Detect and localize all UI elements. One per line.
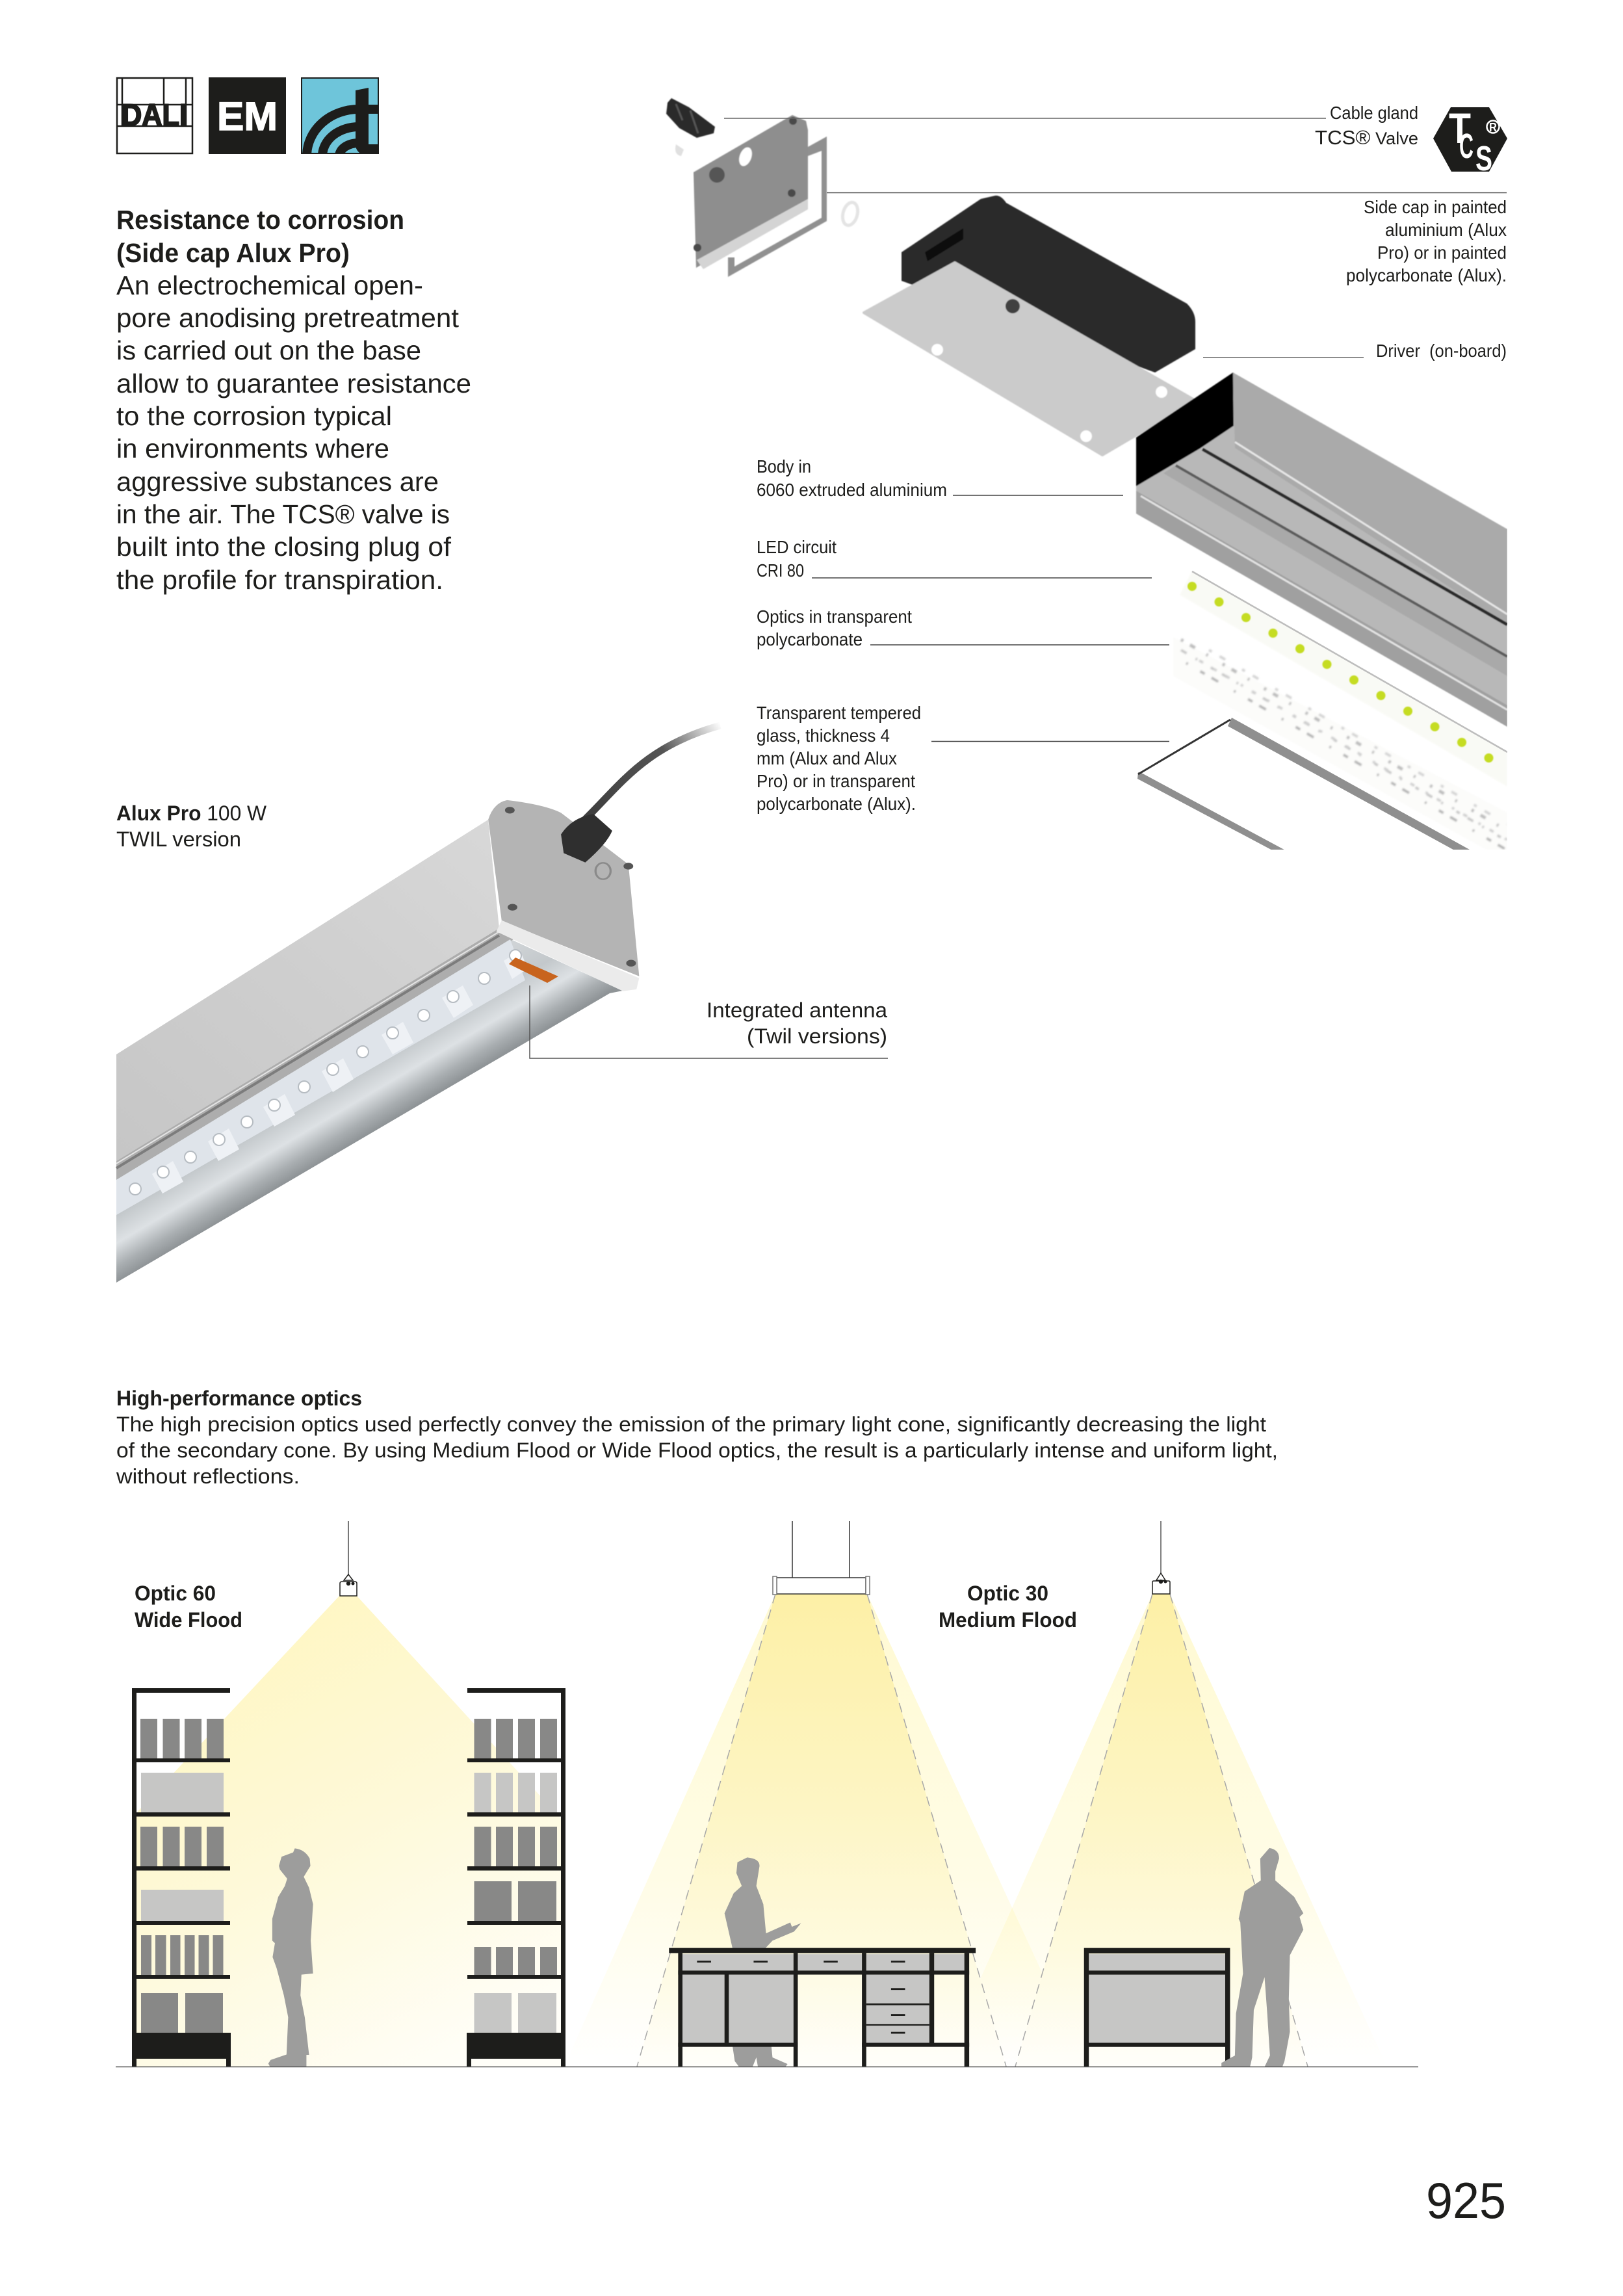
body copy: An electrochemical open- xyxy=(116,270,423,300)
product caption: Alux Pro 100 W: TWIL version xyxy=(116,828,241,851)
top face xyxy=(116,820,499,1161)
frame xyxy=(467,1688,565,2067)
heading: (Side cap Alux Pro) xyxy=(116,238,350,268)
light cone: wide flood xyxy=(133,1596,565,2067)
callout: glass: polycarbonate (Alux). xyxy=(757,794,916,814)
callout: LED circuit xyxy=(757,537,1152,581)
text: high-performance optics: of the secondary cone. By using Medium Flood or Wide Flood optics, the result is a particularly intense and uniform light, xyxy=(116,1439,1278,1462)
callout: body xyxy=(757,456,1123,500)
logo: DALI: DALI xyxy=(122,98,187,132)
callout: body: Body in xyxy=(757,456,811,476)
heading: Resistance to corrosion xyxy=(116,205,404,235)
callout: body: 6060 extruded aluminium xyxy=(757,480,947,500)
callout: driver: Driver (on-board) xyxy=(1376,341,1507,361)
product caption: Alux Pro 100 W xyxy=(116,802,267,851)
callout: side cap: polycarbonate (Alux). xyxy=(1346,265,1507,285)
body copy: allow to guarantee resistance xyxy=(116,369,471,398)
product caption: Alux Pro 100 W: Alux Pro 100 W xyxy=(116,802,267,825)
body copy: built into the closing plug of xyxy=(116,532,452,562)
logo: TCS hexagon: S xyxy=(1475,139,1492,178)
body copy: in environments where xyxy=(116,434,389,463)
dashed beam limits xyxy=(637,1594,1308,2067)
cable gland part xyxy=(666,98,715,156)
text: high-performance optics: The high precision optics used perfectly convey the emission of the primary light cone, significantly decreasing the light xyxy=(116,1413,1266,1436)
callout: side cap: Pro) or in painted xyxy=(1377,242,1507,263)
books xyxy=(474,1719,557,1975)
floor line xyxy=(116,2066,1418,2067)
light cone: medium flood, table outer xyxy=(564,1594,1085,2067)
callout: integrated antenna: Integrated antenna xyxy=(707,998,887,1022)
extrusion channel xyxy=(116,928,513,1180)
cabinet xyxy=(1084,1948,1230,2067)
glass frame part xyxy=(1137,718,1475,853)
label: optic 60 xyxy=(135,1582,242,1632)
optics part xyxy=(1173,637,1507,861)
logo: TCS hexagon: T xyxy=(1449,104,1471,152)
diffuser xyxy=(116,936,623,1283)
logo: DALI xyxy=(117,78,192,153)
callout: glass: mm (Alux and Alux xyxy=(757,748,897,768)
label: optic 30: Optic 30 xyxy=(967,1582,1048,1605)
side cap part xyxy=(694,115,860,277)
intro text: resistance to corrosion xyxy=(116,205,471,595)
callout: glass xyxy=(757,703,1169,814)
callout: side cap xyxy=(827,192,1507,285)
product photo: luminaire xyxy=(116,725,720,1283)
callouts on the exploded view xyxy=(724,103,1507,814)
label: optic 60: Optic 60 xyxy=(135,1582,216,1605)
callout: LED circuit: LED circuit xyxy=(757,537,837,557)
illustration: optics in use xyxy=(116,1521,1418,2067)
page number: 925 xyxy=(1426,2172,1506,2229)
body copy: aggressive substances are xyxy=(116,467,439,497)
LED circuit part xyxy=(1180,571,1507,787)
books xyxy=(140,1719,224,2033)
text: high-performance optics xyxy=(116,1387,1278,1488)
light cone: medium flood, table inner xyxy=(637,1594,1006,2067)
label: optic 60: Wide Flood xyxy=(135,1608,242,1632)
logo: TCS hexagon: R xyxy=(1489,121,1497,134)
logo: TCS hexagon: C xyxy=(1459,127,1474,166)
label: optic 30: Medium Flood xyxy=(939,1608,1077,1632)
callout: cable gland: Cable gland xyxy=(1330,103,1418,123)
callout: glass: Pro) or in transparent xyxy=(757,771,915,791)
callout: integrated antenna xyxy=(530,985,888,1058)
callout: TCS valve: TCS® Valve xyxy=(1315,126,1418,149)
figure: man at desk xyxy=(725,1857,801,2067)
callout: integrated antenna: (Twil versions) xyxy=(747,1024,887,1048)
linear luminaire: medium flood xyxy=(773,1521,870,1595)
logo: EM: EM xyxy=(217,94,278,138)
logo: TCS hexagon xyxy=(1433,104,1507,178)
extruded body part xyxy=(1136,372,1507,727)
callout: LED circuit: CRI 80 xyxy=(757,560,804,581)
logo: EM xyxy=(209,77,286,154)
heading xyxy=(116,205,404,268)
callout: glass: Transparent tempered xyxy=(757,703,921,723)
desk frame xyxy=(669,1948,976,2067)
body copy: to the corrosion typical xyxy=(116,401,392,431)
callout: optics xyxy=(757,607,1169,649)
body copy xyxy=(116,270,471,595)
text: high-performance optics: High-performance optics xyxy=(116,1387,362,1410)
desk xyxy=(669,1948,976,2067)
end cap xyxy=(488,800,639,991)
text: high-performance optics: without reflections. xyxy=(116,1465,300,1488)
pendant luminaire: wide flood xyxy=(340,1521,357,1596)
body copy: is carried out on the base xyxy=(116,335,421,365)
exploded view of the luminaire xyxy=(666,98,1507,861)
light cone: medium flood, pendant outer xyxy=(941,1594,1387,2067)
pendant luminaire: medium flood xyxy=(1152,1521,1170,1594)
driver part xyxy=(864,196,1195,455)
LED band xyxy=(116,939,528,1215)
body copy: the profile for transpiration. xyxy=(116,565,443,595)
cable xyxy=(577,725,720,827)
body copy: pore anodising pretreatment xyxy=(116,303,460,333)
light cone: medium flood, pendant inner xyxy=(1015,1594,1308,2067)
figure: man looking up xyxy=(268,1848,313,2067)
body copy: in the air. The TCS® valve is xyxy=(116,499,450,529)
frame xyxy=(132,1688,231,2067)
label: optic 30 xyxy=(939,1582,1077,1632)
callout: optics: polycarbonate xyxy=(757,629,863,649)
left shelving xyxy=(132,1688,231,2067)
catalogue page xyxy=(116,77,1507,2219)
integrated antenna xyxy=(509,958,558,983)
callout: side cap: aluminium (Alux xyxy=(1385,220,1507,240)
right shelving xyxy=(467,1688,565,2067)
callout: side cap: Side cap in painted xyxy=(1364,197,1507,217)
logo: Twil antenna xyxy=(302,78,378,156)
callout: optics: Optics in transparent xyxy=(757,607,912,627)
figure: standing man xyxy=(1221,1848,1303,2067)
desk panels xyxy=(682,1954,965,2043)
callout: glass: glass, thickness 4 xyxy=(757,725,890,746)
